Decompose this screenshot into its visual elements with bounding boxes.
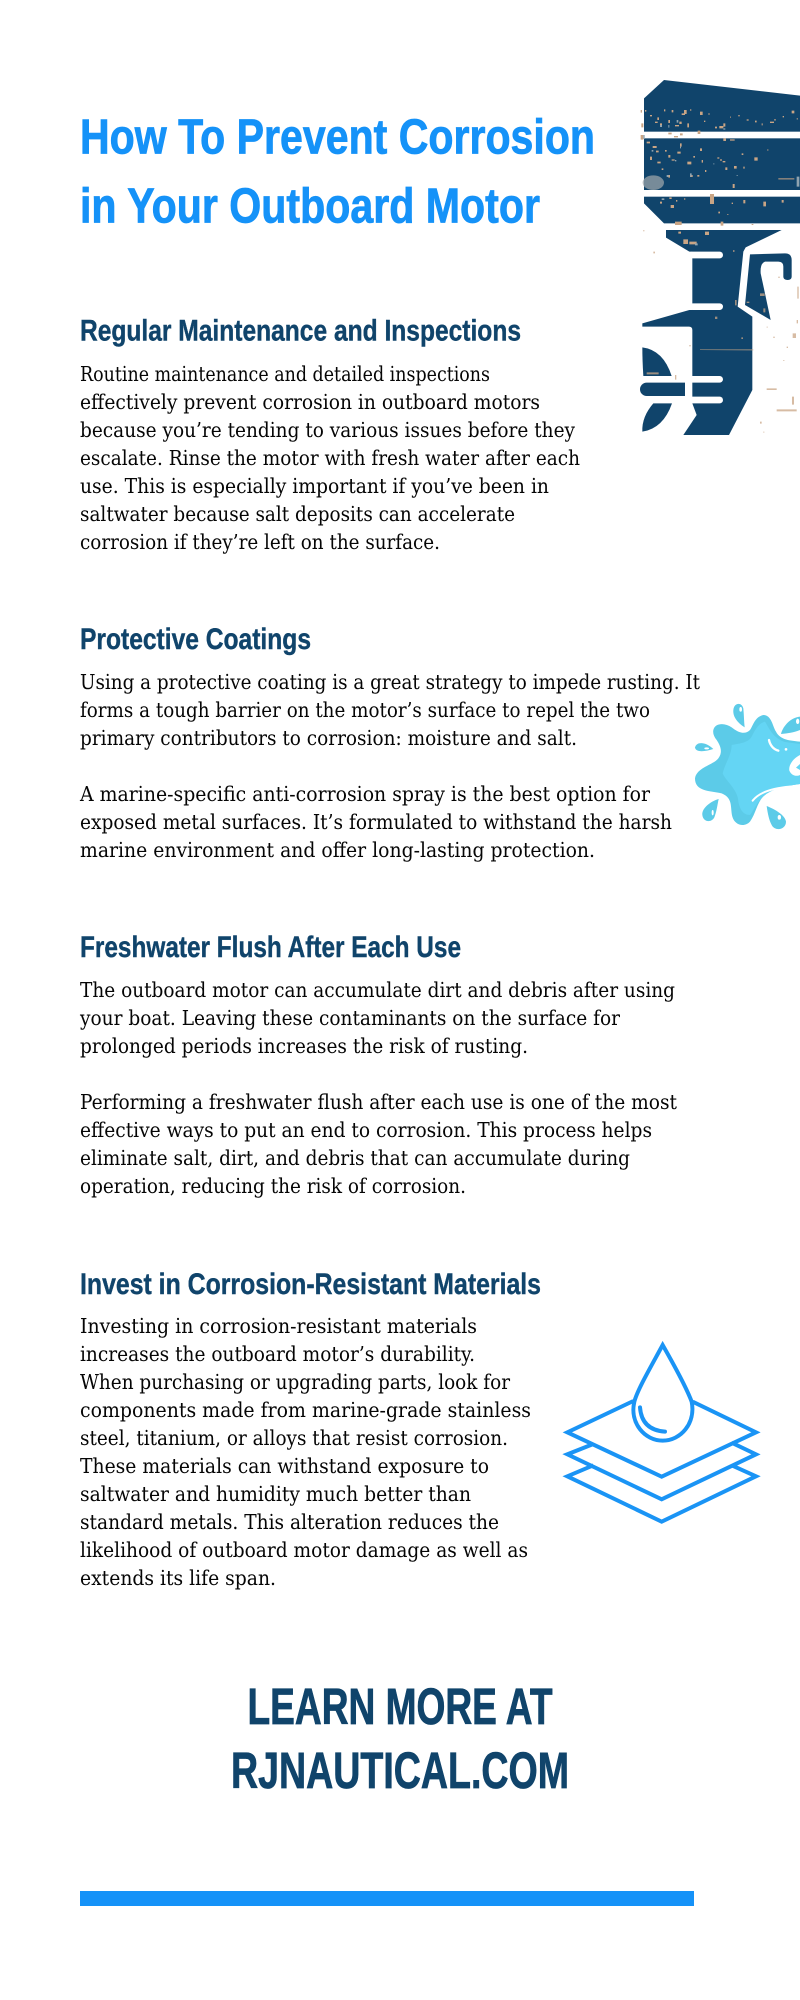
text: corrosion-resistant materials body: increases the outboard motor’s durability.	[80, 1342, 475, 1366]
heading: freshwater flush: Freshwater Flush After Each Use	[80, 931, 461, 964]
text: corrosion-resistant materials body: Investing in corrosion-resistant materials	[80, 1314, 477, 1338]
title: How To Prevent Corrosion	[80, 110, 595, 164]
heading: corrosion-resistant materials: Invest in Corrosion-Resistant Materials	[80, 1268, 541, 1301]
heading: protective coatings: Protective Coatings	[80, 623, 311, 656]
text: freshwater flush body: The outboard motor can accumulate dirt and debris after using	[80, 978, 675, 1002]
text: freshwater flush body: eliminate salt, dirt, and debris that can accumulate during	[80, 1146, 630, 1170]
footer bar	[80, 1891, 694, 1906]
call to action: RJNAUTICAL.COM	[231, 1742, 569, 1799]
text: regular maintenance body: corrosion if they’re left on the surface.	[80, 530, 440, 554]
title	[80, 110, 595, 234]
section: corrosion-resistant materials	[80, 1268, 541, 1590]
section: regular maintenance	[80, 314, 580, 554]
text: corrosion-resistant materials body	[80, 1314, 531, 1590]
text: regular maintenance body: escalate. Rinse the motor with fresh water after each	[80, 446, 580, 470]
text: protective coatings body: forms a tough barrier on the motor’s surface to repel the two	[80, 698, 650, 722]
title: in Your Outboard Motor	[80, 180, 540, 234]
text: regular maintenance body: effectively prevent corrosion in outboard motors	[80, 390, 540, 414]
heading: regular maintenance: Regular Maintenance and Inspections	[80, 314, 521, 348]
text: regular maintenance body: use. This is especially important if you’ve been in	[80, 474, 549, 498]
text: freshwater flush body: your boat. Leaving these contaminants on the surface for	[79, 1006, 620, 1030]
text: corrosion-resistant materials body: steel, titanium, or alloys that resist corrosion.	[80, 1426, 508, 1450]
text: corrosion-resistant materials body: extends its life span.	[80, 1566, 276, 1590]
text: freshwater flush body: operation, reducing the risk of corrosion.	[80, 1174, 466, 1198]
section: protective coatings	[79, 623, 701, 862]
text: freshwater flush body: Performing a freshwater flush after each use is one of the most	[80, 1090, 678, 1114]
text: corrosion-resistant materials body: standard metals. This alteration reduces the	[80, 1510, 499, 1534]
icon: water splash	[695, 704, 800, 829]
text: regular maintenance body: saltwater because salt deposits can accelerate	[80, 502, 515, 526]
text: freshwater flush body	[79, 978, 678, 1198]
text: protective coatings body: primary contributors to corrosion: moisture and salt.	[80, 726, 577, 750]
text: protective coatings body: A marine-specific anti-corrosion spray is the best option for	[79, 782, 650, 806]
icon: water drop on layers	[567, 1345, 756, 1522]
text: corrosion-resistant materials body: saltwater and humidity much better than	[80, 1482, 471, 1506]
text: protective coatings body: exposed metal surfaces. It’s formulated to withstand the harsh	[80, 810, 672, 834]
icon: outboard motor	[640, 80, 800, 435]
text: protective coatings body: marine environment and offer long-lasting protection.	[80, 838, 595, 862]
text: regular maintenance body: Routine maintenance and detailed inspections	[80, 362, 490, 386]
call to action	[231, 1678, 569, 1799]
text: freshwater flush body: effective ways to put an end to corrosion. This process helps	[80, 1118, 652, 1142]
text: regular maintenance body: because you’re tending to various issues before they	[80, 418, 575, 442]
text: freshwater flush body: prolonged periods increases the risk of rusting.	[80, 1034, 528, 1058]
text: corrosion-resistant materials body: likelihood of outboard motor damage as well as	[80, 1538, 528, 1562]
text: regular maintenance body	[80, 362, 580, 554]
text: corrosion-resistant materials body: These materials can withstand exposure to	[80, 1454, 489, 1478]
call to action: LEARN MORE AT	[248, 1678, 552, 1735]
section: freshwater flush	[79, 931, 678, 1198]
text: protective coatings body	[79, 670, 701, 862]
text: protective coatings body: Using a protective coating is a great strategy to impede rusting. It	[80, 670, 701, 694]
text: corrosion-resistant materials body: components made from marine-grade stainless	[80, 1398, 531, 1422]
text: corrosion-resistant materials body: When purchasing or upgrading parts, look for	[80, 1370, 510, 1394]
